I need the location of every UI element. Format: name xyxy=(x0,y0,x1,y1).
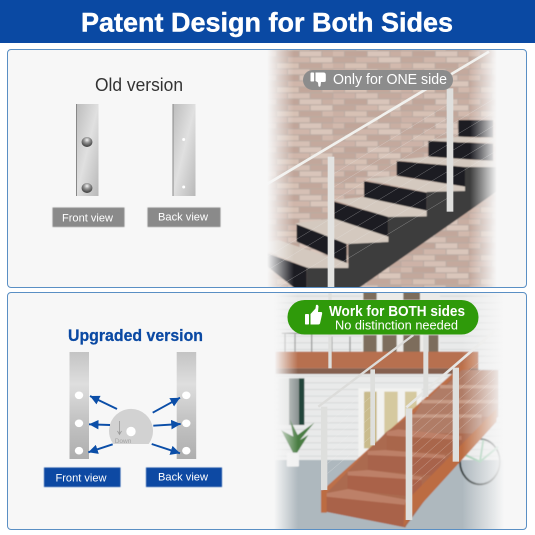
posts xyxy=(328,157,334,287)
round insert piece: Down xyxy=(115,438,132,445)
label: upgraded back view xyxy=(146,468,222,487)
bike wheel xyxy=(460,439,500,484)
badge: work for both sides: No distinction needed xyxy=(335,318,458,332)
label: upgraded front view: Front view xyxy=(56,472,107,484)
badge: work for both sides xyxy=(288,300,478,334)
ground xyxy=(276,460,500,529)
arrows: insert to holes xyxy=(88,396,181,453)
label: old front view: Front view xyxy=(62,212,113,224)
right stringer xyxy=(403,408,497,527)
deck band xyxy=(275,352,478,368)
upgraded back plate xyxy=(177,352,196,459)
upper steps xyxy=(412,370,489,434)
badge: only for one side: Only for ONE side xyxy=(333,72,447,88)
photo: house staircase xyxy=(276,293,501,529)
risers xyxy=(265,120,493,288)
treads xyxy=(265,137,495,268)
cables xyxy=(265,98,495,287)
cables xyxy=(328,362,494,486)
heading: upgraded version: Upgraded version xyxy=(68,326,203,345)
badge: work for both sides: Work for BOTH sides xyxy=(329,303,465,320)
old back plate xyxy=(172,104,196,196)
label: old front view xyxy=(52,208,124,227)
photo: brick wall staircase xyxy=(268,50,496,287)
left stringer xyxy=(322,367,470,494)
handrail xyxy=(265,52,489,185)
deck railing xyxy=(282,333,352,353)
badge: only for one side xyxy=(303,70,453,90)
french doors xyxy=(358,388,422,457)
plant xyxy=(281,419,314,453)
icon: thumbs down xyxy=(310,72,326,87)
label: old back view: Back view xyxy=(158,212,208,224)
upgraded front plate xyxy=(70,352,89,459)
lower steps xyxy=(387,432,462,453)
stringer xyxy=(307,167,497,288)
lower window xyxy=(278,378,304,425)
title banner xyxy=(0,0,535,43)
posts xyxy=(321,293,459,520)
label: upgraded back view: Back view xyxy=(158,472,208,484)
panel: upgraded version xyxy=(8,292,527,533)
stair body xyxy=(326,370,498,527)
handrails xyxy=(318,335,413,407)
round insert piece xyxy=(109,409,153,445)
upper doors xyxy=(362,296,440,350)
old front plate xyxy=(76,104,98,196)
icon: thumbs up xyxy=(305,305,322,324)
label: old back view xyxy=(148,208,220,227)
heading: old version: Old version xyxy=(95,75,183,95)
title banner: Patent Design for Both Sides xyxy=(81,8,453,38)
panel: old version xyxy=(8,48,527,288)
label: upgraded front view xyxy=(44,468,120,487)
